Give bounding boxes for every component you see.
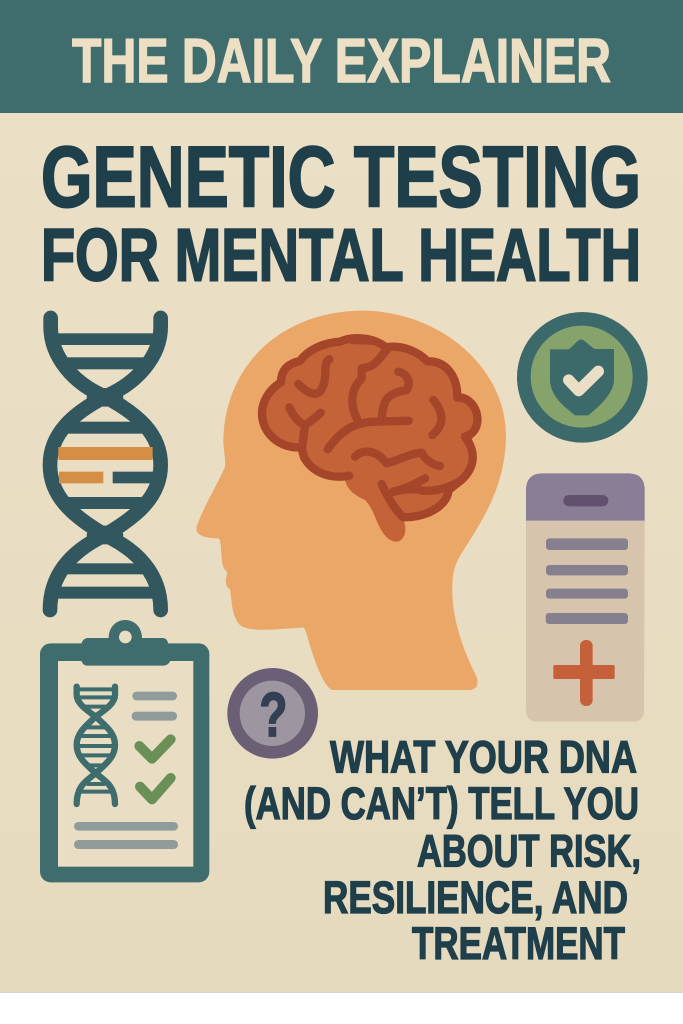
subtitle line 5: TREATMENT	[412, 918, 625, 969]
subtitle	[244, 732, 641, 969]
head silhouette	[196, 311, 506, 690]
icon: shield badge and medication card	[517, 312, 648, 722]
brain	[258, 336, 480, 542]
main title	[41, 130, 641, 296]
icon: DNA helix	[50, 318, 161, 610]
green check marks	[139, 739, 171, 799]
icon: head with brain	[196, 311, 506, 690]
icon: red cross	[553, 640, 615, 706]
icon: clipboard with DNA report	[40, 620, 209, 882]
report lines	[74, 692, 178, 849]
header band	[0, 0, 683, 113]
icon: shield check badge	[517, 312, 648, 443]
icon: medication report card	[526, 473, 645, 722]
highlighted gene bars	[58, 447, 153, 483]
mini DNA	[77, 687, 115, 804]
icon: question mark badge: ?	[259, 681, 287, 750]
icon: question mark badge	[227, 668, 318, 759]
icon: clipboard and question badge	[40, 620, 318, 882]
